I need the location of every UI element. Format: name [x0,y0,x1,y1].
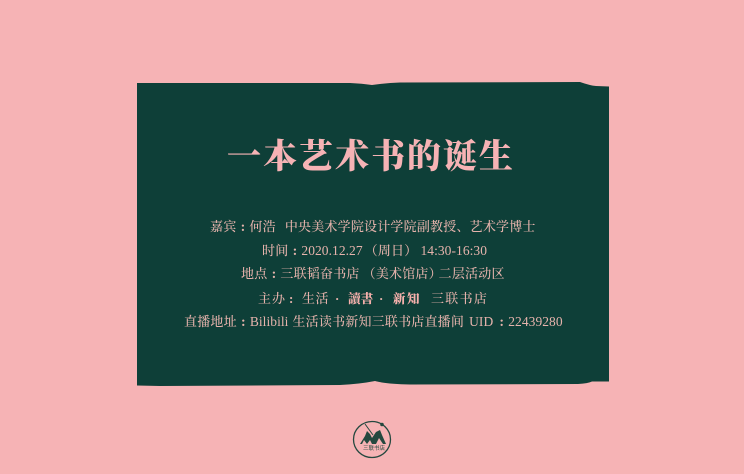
organiser line: : [289,290,294,306]
organiser line: 新知 [393,292,421,306]
text block: event details [184,219,563,330]
livestream line: : [241,314,246,330]
organiser line: 生活 [302,290,329,306]
organiser line: · [379,290,384,306]
icon: bookstore logo [352,420,392,458]
title: 一本艺术书的诞生 [227,129,515,178]
guest line: 嘉宾 何浩 中央美术学院设计学院副教授、艺术学博士 [210,219,536,234]
venue line: : [272,267,276,282]
organiser line: · [335,290,340,306]
livestream line: 直播地址 Bilibili 生活读书新知三联书店直播间 UID 22439280 [184,314,563,328]
organiser line: 三联书店 [431,290,488,306]
guest line: : [241,220,245,235]
organiser line: 主办 [258,290,286,306]
icon: bookstore logo: 三联书店 [363,444,385,452]
venue line: 地点 三联韬奋书店（美术馆店）二层活动区 [241,266,505,281]
time line: : [293,244,297,258]
livestream line: : [499,314,504,330]
time line: 时间 2020.12.27（周日）14:30-16:30 [262,242,487,258]
organiser line: 讀書 [348,292,373,306]
organiser line [258,290,488,306]
